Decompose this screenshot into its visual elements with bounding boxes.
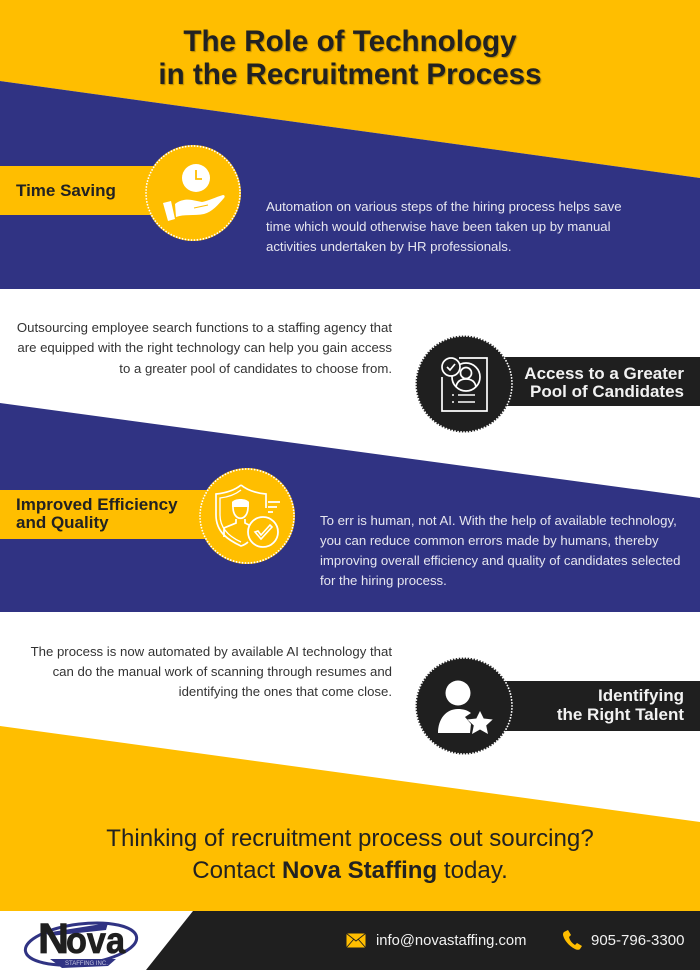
title bbox=[158, 25, 542, 91]
heading: talent: the Right Talent bbox=[557, 705, 684, 724]
icon: phone bbox=[563, 930, 582, 950]
band: access bbox=[455, 357, 700, 406]
text: efficiency: improving overall efficiency and quality of candidates selected bbox=[320, 553, 680, 568]
text: access to candidates: are equipped with the right technology can help you gain access bbox=[17, 340, 392, 355]
text: identifying talent: can do the manual work of scanning through resumes and bbox=[53, 664, 392, 679]
logo: Nova bbox=[24, 916, 138, 968]
contact: phone bbox=[563, 930, 684, 950]
heading: access bbox=[524, 364, 684, 401]
section: access to candidates bbox=[416, 336, 700, 432]
text: efficiency: you can reduce common errors made by humans, thereby bbox=[320, 533, 659, 548]
text: efficiency bbox=[320, 513, 680, 588]
icon: person with star bbox=[416, 658, 513, 754]
call to action bbox=[106, 825, 594, 884]
call to action: Contact Nova Staffing today. bbox=[192, 857, 508, 884]
text: time saving bbox=[266, 198, 622, 254]
section: time saving bbox=[0, 145, 622, 254]
text: identifying talent bbox=[30, 644, 392, 699]
heading: talent: Identifying bbox=[598, 686, 684, 705]
section: improved efficiency bbox=[0, 468, 295, 564]
icon: candidate document bbox=[416, 336, 513, 432]
call to action: Thinking of recruitment process out sourcing? bbox=[106, 825, 594, 852]
section: identifying talent bbox=[416, 658, 700, 754]
icon: hand holding clock bbox=[145, 145, 241, 241]
logo: Nova: N bbox=[38, 916, 69, 963]
icon: envelope bbox=[346, 934, 366, 948]
text: access to candidates bbox=[17, 320, 392, 376]
title: The Role of Technology bbox=[183, 25, 517, 58]
heading: efficiency: and Quality bbox=[16, 512, 109, 532]
contact: email bbox=[346, 933, 526, 949]
heading: access: Pool of Candidates bbox=[530, 382, 684, 401]
text: phone: 905-796-3300 bbox=[591, 932, 684, 949]
text: time saving: Automation on various steps of the hiring process helps save bbox=[266, 198, 622, 214]
text: email: info@novastaffing.com bbox=[376, 933, 526, 949]
band: efficiency bbox=[0, 490, 215, 539]
text: efficiency: To err is human, not AI. With the help of available technology, bbox=[320, 513, 677, 528]
heading: efficiency bbox=[16, 494, 178, 532]
heading: access: Access to a Greater bbox=[524, 364, 684, 382]
band: time saving bbox=[0, 166, 160, 215]
logo: Nova: ova bbox=[66, 920, 125, 961]
text: identifying talent: The process is now automated by available AI technology that bbox=[31, 644, 392, 658]
icon: shield person check bbox=[199, 468, 295, 564]
text: identifying talent: identifying the ones that come close. bbox=[179, 684, 392, 699]
text: access to candidates: Outsourcing employee search functions to a staffing agency that bbox=[17, 320, 392, 335]
text: access to candidates: to a greater pool of candidates to choose from. bbox=[119, 361, 392, 376]
title: in the Recruitment Process bbox=[158, 58, 542, 91]
text: time saving: activities undertaken by HR professionals. bbox=[266, 239, 512, 254]
heading: efficiency: Improved Efficiency bbox=[16, 494, 178, 514]
band: talent bbox=[455, 681, 700, 731]
heading: time saving: Time Saving bbox=[16, 180, 116, 200]
text: time saving: time which would otherwise have been taken up by manual bbox=[266, 219, 611, 234]
logo: Nova: STAFFING INC. bbox=[65, 961, 108, 967]
text: efficiency: for the hiring process. bbox=[320, 573, 447, 588]
heading: talent bbox=[557, 686, 684, 724]
